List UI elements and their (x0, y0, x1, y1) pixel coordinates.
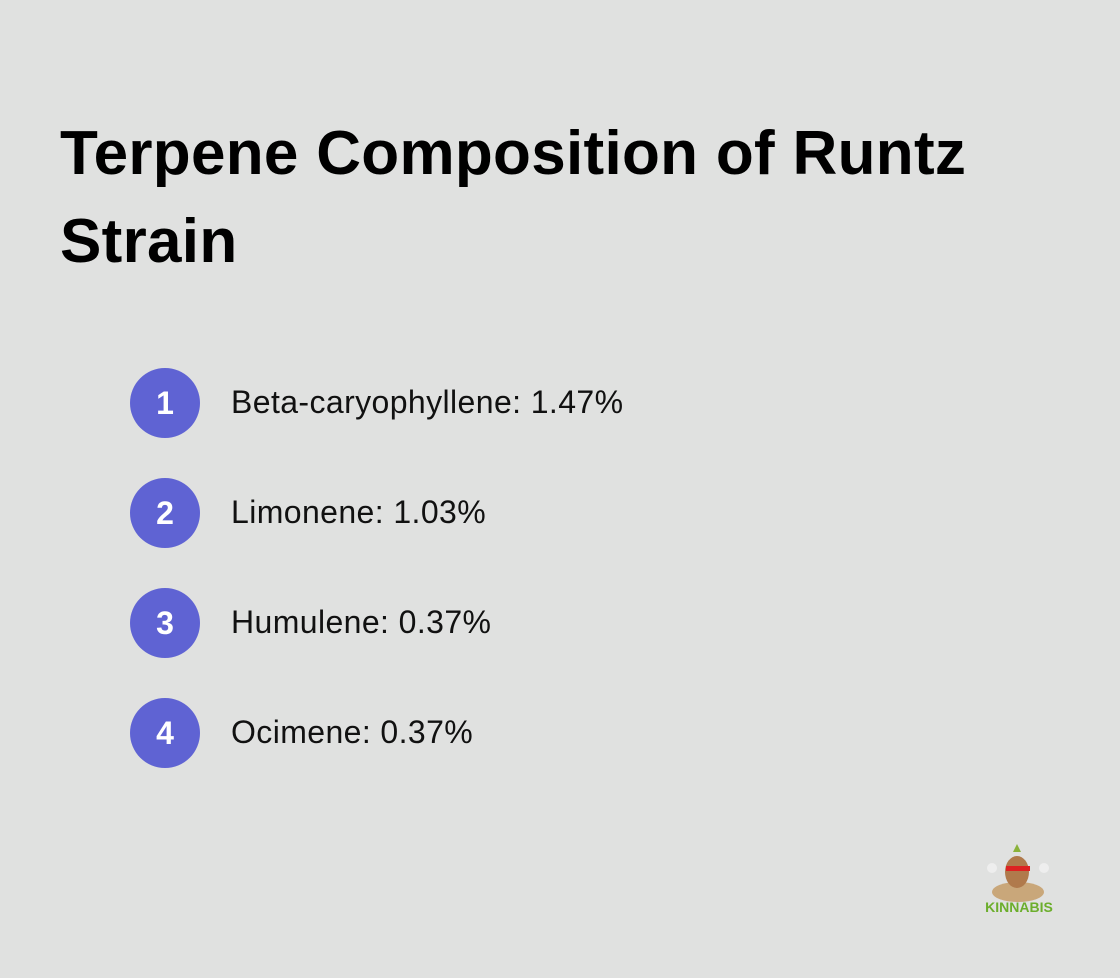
badge 3: 3 (156, 605, 174, 641)
badge 4 (130, 698, 200, 768)
list item 4: Ocimene: 0.37% (231, 714, 473, 750)
logo (985, 844, 1053, 915)
list item 1: Beta-caryophyllene: 1.47% (231, 384, 623, 420)
badge 4: 4 (156, 715, 174, 751)
list item 3: Humulene: 0.37% (231, 604, 491, 640)
badge 1: 1 (156, 385, 174, 421)
list item 2 (130, 478, 486, 548)
title: Terpene Composition of Runtz Strain (60, 119, 966, 276)
logo: KINNABIS (985, 899, 1053, 915)
badge 2: 2 (156, 495, 174, 531)
list item 4 (130, 698, 473, 768)
list item 1 (130, 368, 623, 438)
badge 3 (130, 588, 200, 658)
badge 1 (130, 368, 200, 438)
list item 3 (130, 588, 491, 658)
badge 2 (130, 478, 200, 548)
list item 2: Limonene: 1.03% (231, 494, 486, 530)
